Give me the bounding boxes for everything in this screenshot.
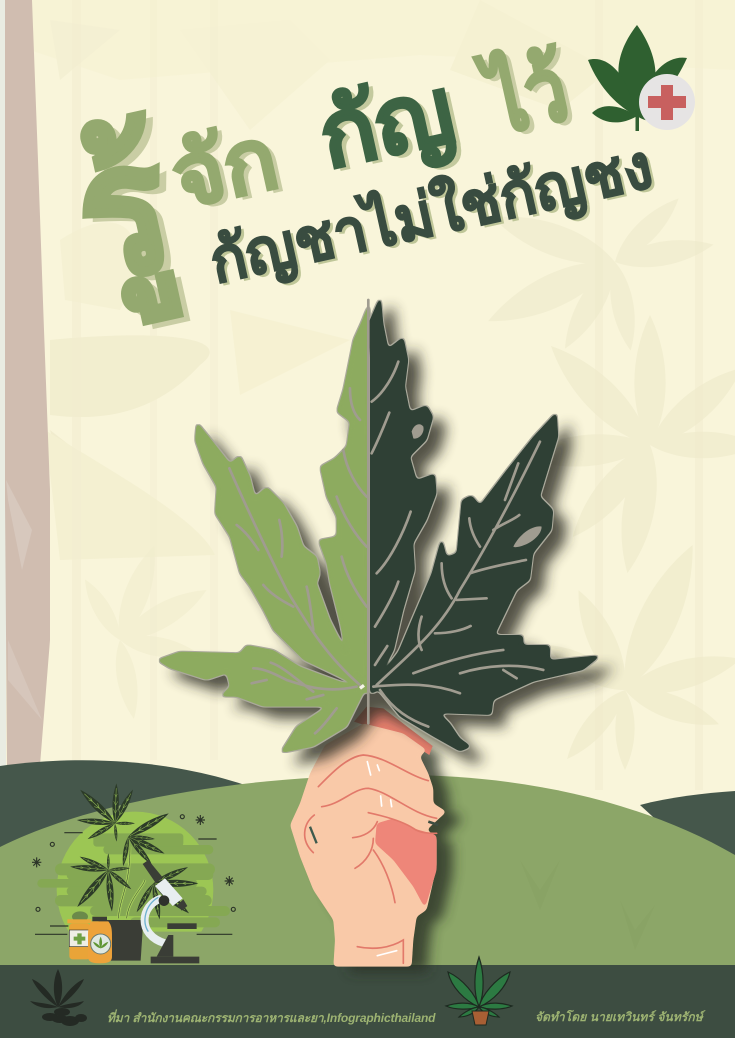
palm shade [375,818,437,908]
hills [0,760,735,965]
background leaf: middle right [519,315,735,576]
pot [98,920,143,961]
cannabis leaf, two-tone [157,295,615,765]
illustration: plant, jars and microscope [32,783,235,968]
hand skin [290,723,447,967]
word two: กัญ [310,59,463,188]
jar one [67,911,91,959]
background leaf: lower left [78,542,213,720]
dark half [368,295,602,752]
red petal behind [417,705,435,712]
stripe clouds [37,833,230,927]
green half [157,300,370,753]
title: first line [58,39,577,329]
source credit: ที่มา สำนักงานคณะกรรมการอาหารและยา,Infographicthailand [107,1011,435,1025]
author credit: จัดทำโดย นายเทวินทร์ จันทรักษ์ [535,1010,703,1024]
word three: ไว้ [479,39,577,154]
decorative ticks and stars [32,815,235,934]
plant stems [118,847,145,918]
red cross [648,85,686,120]
big initial: รู้ [58,101,189,322]
footer band [0,965,735,1038]
leaf holes [412,424,424,439]
hand [290,707,463,972]
background leaf: lower right [542,537,735,770]
background leaf: upper right [481,191,716,355]
title: second line: กัญชาไม่ใช่กัญชง [204,132,659,297]
hand shadow [306,731,463,972]
plant leaves [70,783,198,920]
finger creases [305,755,437,963]
left pillar [0,0,50,770]
red palm back [354,707,433,755]
icon: potted cannabis plant [446,957,512,1025]
icon: footer leaf with pills [30,969,87,1026]
microscope [143,860,199,963]
green sun [56,812,214,932]
jar two [88,917,112,963]
icon: cannabis leaf with red cross [588,25,695,131]
circle badge [639,74,695,130]
leaf shadow [170,307,615,765]
word one: จัก [163,108,286,227]
leaf veins [229,300,543,733]
